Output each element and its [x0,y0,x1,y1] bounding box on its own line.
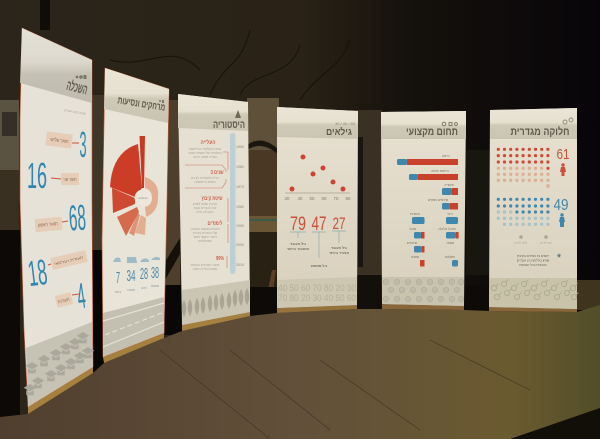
entries: 3 שנים [210,170,224,176]
banner sheet [178,94,250,325]
bar chart: מסחר [446,241,454,245]
banner 3: history [178,94,250,331]
wood base [103,333,164,363]
entry notes: בחלוציות של ראשית המאה [188,151,222,155]
header band [490,108,577,139]
entry notes [188,147,222,271]
entry notes: בניית התשתיות לקיבוץ [191,176,219,180]
banner 1: education: 68 [68,197,87,238]
banner sheet [489,108,577,309]
header band [104,68,169,123]
row: first degree: תואר ראשון [38,221,59,229]
icons: education [76,75,86,79]
entry notes: והקהילה כולה [196,210,214,214]
entry notes: הקיבוץ שואף לשוויון [193,202,217,206]
vehicles and numbers: רכב [141,286,147,290]
scatter chart: 40 [298,196,303,201]
entry notes: של העובדים בקיבוץ [193,231,218,235]
entries: שיטת קיבוץ [202,196,223,202]
legend [515,235,552,245]
bottom band with numbers: 40 50 60 70 80 20 30 [278,283,356,293]
entry notes: השתלמויות [198,239,212,243]
timeline [185,133,244,274]
bar chart: ספורט [411,255,419,259]
wood base [277,305,357,313]
icon: gender symbols [563,118,573,124]
dots: men [497,198,550,214]
row: technician diploma [26,250,88,294]
bar chart: שירותים עסקיים [428,198,449,202]
subtitle: ages: 30 / 40 / 50 [335,121,356,126]
key figure: oldest: המבוגר ביותר [287,247,310,251]
title: distances: מרחקים ונסיעות [117,95,166,114]
icons: professions [442,122,457,126]
row: second degree: 16 [27,155,47,196]
row: certificates: תעודות [57,297,70,304]
ground: paving [0,305,600,439]
vehicles and numbers: 38 [151,265,159,282]
callout with asterisk: ועובדות בכל הענפים [519,263,547,267]
bottom band with numbers: 70 80 20 30 40 50 60 [278,293,356,303]
icon: trees [235,110,241,118]
entry notes: עבודה חקלאית והתיישבות [189,147,222,151]
legend: ללא ילדים [515,241,528,245]
vehicles and numbers [113,257,160,294]
bar chart: הייטק [442,154,450,158]
key figure: youngest: 27 [332,214,346,233]
row: certificates [55,275,88,316]
title: gender split: חלוקה מגדרית [510,126,570,138]
banner 5: professional field [381,111,466,310]
dots: women outline [497,167,550,188]
bar chart: חקלאות [445,255,455,259]
figure: men count [554,197,569,227]
vehicles and numbers: 34 [126,268,136,285]
dots: women [497,148,550,170]
vehicles and numbers: תחבורה [127,288,135,292]
banner 6: gender split [489,108,578,312]
entry notes: בשנים הראשונות [194,180,216,184]
row: technician diploma: תעודת הנדסאי [53,255,84,266]
banner 1: education [20,28,94,414]
callout with asterisk: יחסים בין המינים בקיבוץ [517,254,549,258]
key figure: oldest [287,214,310,251]
bottom band with trees [182,280,250,325]
header band [381,111,466,139]
entry notes: נמצא בעלייה רצופה [193,267,217,271]
bar chart: תעשייה [444,183,454,187]
title: history: היסטוריה [213,119,245,131]
banner sheet [277,107,358,308]
timeline: 1950 [236,145,244,149]
figure: women count [556,146,570,176]
wood base [489,307,577,312]
entry notes: שיעור העובדים בענפים [191,263,220,267]
timeline: 2010 [236,263,244,267]
wood base [382,304,464,310]
row: second degree: תואר שני [64,177,77,183]
scatter chart: 80 [346,196,351,201]
vehicles and numbers: 7 [116,270,120,287]
vehicles and numbers: אוטובוס [151,284,159,288]
banner sheet [381,111,466,306]
vehicles and numbers: 28 [140,266,148,283]
header band [20,28,92,103]
road band [103,297,164,357]
bottom band with gender symbols [489,278,578,309]
key figure: average: גיל ממוצע [311,264,328,268]
key figure: average: 47 [312,214,326,235]
banner 1: education: 3 [80,124,86,165]
bottom band with icons [382,277,464,306]
legend: עם ילדים [540,241,552,245]
scatter chart: 70 [334,196,339,201]
bar chart [397,154,459,266]
row: first degree [35,197,87,238]
header band [178,94,248,131]
entries: לימודים [208,220,222,227]
key figure: oldest: גיל העובד [290,242,306,246]
vehicles and numbers: ברגל [115,290,121,294]
entry notes: לימודי המשך ותואר [193,235,217,239]
entries: 99% [216,256,224,262]
row: technician diploma: 18 [26,251,49,294]
entries [200,139,224,262]
key figure: youngest: הצעיר ביותר [329,251,350,255]
figure: men count: 49 [554,197,569,214]
key figure: youngest: גיל העובד [331,246,347,250]
scatter chart: 50 [310,196,315,201]
bottom band with numbers [277,277,357,308]
header band [277,107,358,139]
bar chart: מנהל [410,227,416,231]
wood base [182,312,250,331]
entries: העלייה [200,139,216,146]
key figure: youngest [329,214,350,255]
dots: men outline [497,211,549,226]
callout with asterisk: שוויון בחלוקה בין עובדים [517,258,550,262]
bar chart: תעשיות [410,212,420,216]
key figure: average [311,214,328,268]
radial chart [110,136,158,236]
scatter chart: 30 [285,196,290,201]
bar chart: שירותים [407,241,418,245]
bar chart: מינהל וכלכלה [438,227,456,231]
scatter chart: 60 [322,196,327,201]
scatter chart [285,154,351,201]
entry notes: של העובדים בענף [194,206,217,210]
banner sheet [20,28,93,407]
row: certificates: 4 [74,275,88,316]
timeline: 1990 [236,224,244,228]
key figure: oldest: 79 [290,214,306,235]
callout with asterisk [517,252,562,267]
subtitle: השכלה בקרב העובדים [64,108,86,116]
title: professional field: תחום מקצועי [406,126,458,138]
callout with asterisk: * [557,252,562,264]
bottom band with caps [24,322,94,407]
radial chart: הנוסעים [139,197,148,200]
row: third degree [45,124,86,165]
figure: women count: 61 [556,146,570,163]
banner sheet [102,68,169,357]
banner 2: distances and travel [102,68,169,363]
icons: distances [159,100,164,103]
bar chart: בריאות ורווחה [431,169,449,173]
title: education: השכלה [65,77,89,97]
timeline: 2000 [236,243,244,247]
title: ages: גילאים [326,126,352,138]
wood base [28,365,93,414]
row: third degree: תואר שלישי [49,136,69,145]
entry notes: עבודת אדמה וחינוך [193,155,217,159]
entry notes: השכלה ומקצוע בעבודה [191,227,220,231]
bar chart: בינוי [447,212,453,216]
banner 4: ages [277,107,358,313]
timeline: 1980 [236,205,244,209]
timeline: 1960 [236,165,244,169]
timeline: 1970 [236,185,244,189]
